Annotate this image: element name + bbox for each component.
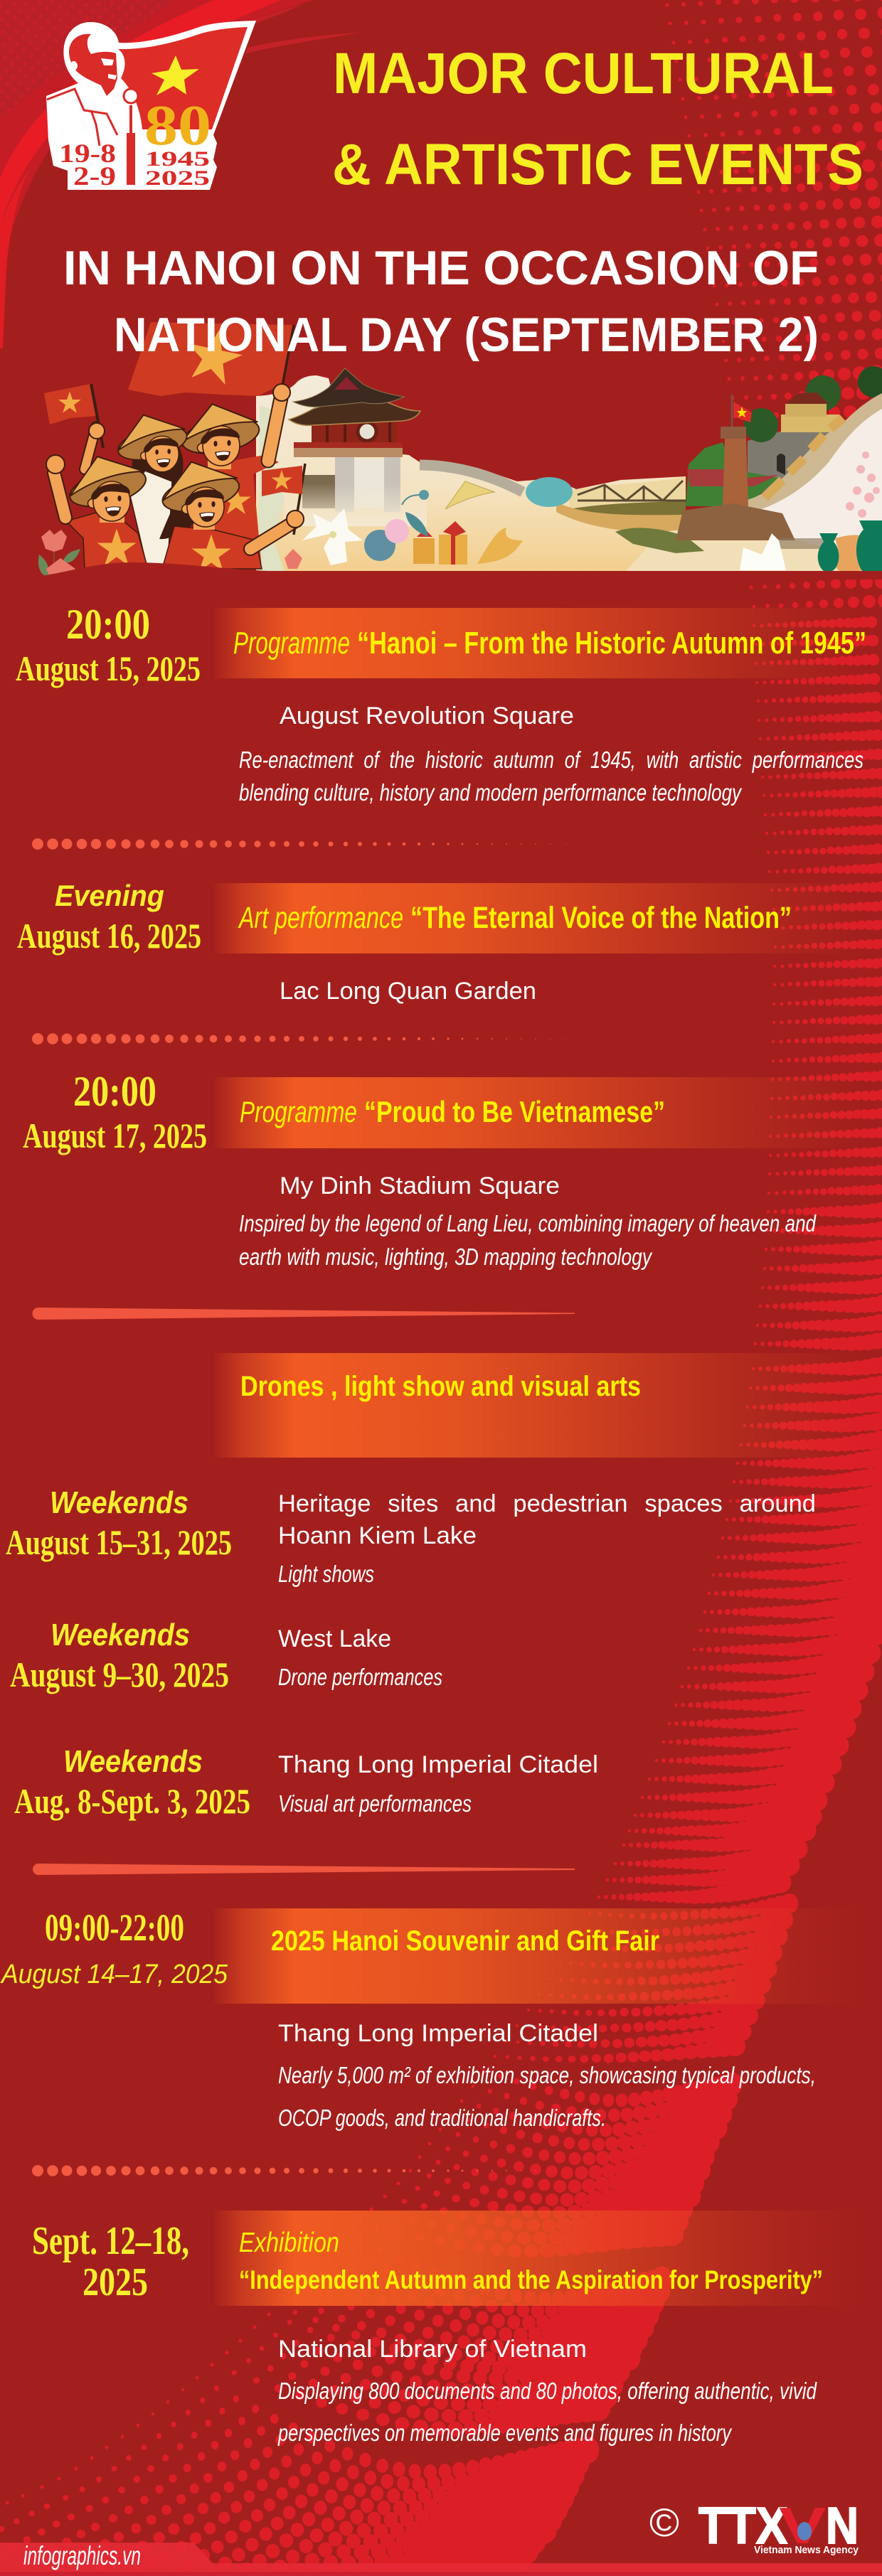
red foreground curve [28,562,882,579]
event title [238,901,792,935]
title: MAJOR CULTURAL [333,41,834,106]
dates: 2025 [145,166,210,190]
light shows item: Light shows [278,1561,374,1587]
time and date: August 16, 2025 [17,916,201,956]
woman at the front [155,453,293,572]
date: 2025 [83,2260,148,2304]
event: exhibition [32,2211,857,2446]
time and date [0,1906,228,1989]
citadel [686,366,882,506]
light shows item: Hoann Kiem Lake [278,1522,477,1549]
drone performances item: Drone performances [278,1664,442,1690]
light shows item [6,1485,816,1587]
description: blending culture, history and modern performance technology [239,779,743,806]
subtitle: NATIONAL DAY (SEPTEMBER 2) [114,308,819,362]
banner [212,1908,857,2004]
man at the front left [46,446,150,569]
time and date: 20:00 [73,1068,156,1115]
event title [240,1095,665,1128]
time and date [16,601,201,688]
copyright mark: © [649,2500,679,2545]
conical hat [445,481,494,509]
time and date [23,1068,207,1155]
logo: 80th anniversary emblem [46,21,256,191]
lotus and leaves [364,490,429,561]
description: OCOP goods, and traditional handicrafts. [278,2105,606,2131]
event title: “Proud to Be Vietnamese” [364,1095,665,1128]
venue: Lac Long Quan Garden [280,978,536,1005]
logo: TTXVN Vietnam News Agency [698,2498,859,2556]
event title: Programme [240,1095,357,1128]
event 3 [23,1068,857,1270]
event title [239,2228,823,2294]
venue: Thang Long Imperial Citadel [278,2020,598,2047]
drone performances item: West Lake [278,1625,391,1652]
flag tower [676,395,825,549]
visual art item [14,1744,598,1821]
dates: 2-9 [73,162,116,191]
scene base hills [256,375,686,571]
description [239,1210,817,1270]
description: perspectives on memorable events and figures in history [277,2420,733,2446]
illustration: Hanoi scene with crowd, pagoda and flag tower [28,322,882,579]
gifts and petals [413,521,523,565]
logo: TTXVN Vietnam News Agency: TTX [698,2498,787,2555]
top-left red swoosh [0,0,363,348]
description: earth with music, lighting, 3D mapping technology [239,1244,653,1270]
pattern ribbon [420,465,523,492]
patterned ribbon on the right hill [740,393,882,513]
time and date: August 17, 2025 [23,1116,207,1155]
event title: Programme [233,626,350,661]
subtitle: IN HANOI ON THE OCCASION OF [63,241,819,295]
banner [212,1353,857,1458]
lotus at bottom left [38,530,302,577]
dates: 19-8 [59,139,116,169]
bridge [556,476,686,533]
logo: TTXVN Vietnam News Agency: N [826,2498,859,2555]
description [278,2062,816,2131]
logo: TTXVN Vietnam News Agency: Vietnam News Agency [754,2544,859,2556]
event title: Art performance [238,901,403,935]
time and date: August 14–17, 2025 [0,1960,228,1989]
lotus seed pod [526,477,573,507]
drone performances item [10,1618,442,1694]
lily left [302,508,363,565]
white hill [748,409,882,571]
banner [212,1077,857,1148]
woman at the back [85,406,190,565]
visual art item: Thang Long Imperial Citadel [278,1751,598,1778]
green leaves column [257,405,285,571]
banner [212,883,857,953]
footer band [0,2543,882,2576]
heading: Drones , light show and visual arts [240,1371,641,1402]
plum blossom [846,451,880,518]
pagoda [285,368,427,526]
event title: “The Eternal Voice of the Nation” [410,901,792,935]
event title: Exhibition [239,2228,339,2258]
source: infographics.vn: infographics.vn [23,2541,141,2570]
dates: 1945 [145,147,210,171]
time and date [17,879,201,956]
time and date: August 15, 2025 [16,648,201,688]
banner [212,608,857,678]
big flag [128,322,294,396]
light shows item: Heritage sites and pedestrian spaces around [278,1490,816,1517]
banner [212,2211,857,2306]
small flag left [44,384,103,448]
man at the back right [176,384,290,569]
venue: August Revolution Square [280,702,574,729]
time and date: Evening [55,879,164,912]
title [332,41,864,197]
visual art item: Visual art performances [278,1790,472,1817]
section: drones, light show and visual arts [6,1353,857,1821]
80 numeral: 80 [144,95,211,157]
venue: National Library of Vietnam [278,2336,587,2363]
drone performances item: August 9–30, 2025 [10,1655,229,1694]
drone performances item: Weekends [51,1618,190,1652]
subtitle [63,241,819,362]
lily right [740,533,786,570]
vases [818,520,882,571]
trees near the tower base [615,528,704,553]
event title: 2025 Hanoi Souvenir and Gift Fair [271,1925,659,1957]
light shows item: August 15–31, 2025 [6,1522,232,1562]
visual art item: Weekends [63,1744,203,1779]
light shows item: Weekends [50,1485,188,1520]
dates [59,139,210,191]
logo: TTXVN Vietnam News Agency: V [779,2498,826,2555]
description [239,747,864,806]
date [32,2219,189,2304]
venue: My Dinh Stadium Square [280,1172,560,1199]
description [277,2378,817,2446]
time and date: 09:00-22:00 [45,1906,184,1949]
visual art item: Aug. 8-Sept. 3, 2025 [14,1781,250,1821]
date: Sept. 12–18, [32,2219,189,2263]
time and date: 20:00 [66,601,150,648]
event: souvenir and gift fair [0,1906,857,2131]
small flag right [262,464,305,535]
event 2 [17,879,857,1005]
event 1 [16,601,866,806]
